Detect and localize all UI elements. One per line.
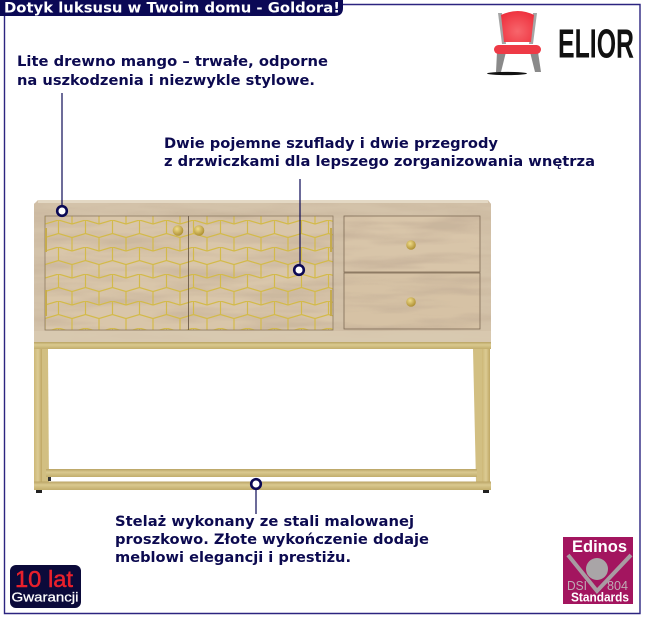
text block: steel frame: proszkowo. Złote wykończenie dodaje: [115, 532, 429, 548]
wooden carcass: [34, 200, 491, 343]
text block: steel frame: meblowi elegancji i prestiżu.: [115, 550, 351, 566]
sideboard illustration: [34, 200, 491, 493]
text block: solid mango wood: Lite drewno mango – trwałe, odporne: [17, 54, 328, 70]
text block: drawers and doors: Dwie pojemne szuflady i dwie przegrody: [164, 136, 498, 152]
badge: Edinos standards: Standards: [571, 590, 629, 604]
door knobs: [173, 225, 204, 236]
bottom drawer: [344, 273, 480, 329]
title banner: Dotyk luksusu w Twoim domu - Goldora!: [4, 0, 340, 16]
callout marker: wood: [57, 93, 67, 216]
text block: steel frame: Stelaż wykonany ze stali malowanej: [115, 514, 414, 530]
top drawer: [344, 216, 480, 272]
badge: Edinos standards: Edinos: [572, 537, 627, 556]
text block: drawers and doors: z drzwiczkami dla lepszego zorganizowania wnętrza: [164, 154, 595, 170]
badge: 10 year warranty: Gwarancji: [12, 590, 79, 604]
callout marker: frame: [251, 479, 261, 514]
icon: red chair: [487, 11, 541, 75]
badge: Edinos standards: DSI: [567, 578, 587, 593]
gold apron strip: [34, 342, 491, 349]
logo: Elior chair and wordmark: [487, 11, 634, 75]
badge: Edinos standards: 804: [607, 578, 628, 593]
badge: 10 year warranty: 10 lat: [15, 566, 74, 592]
text block: solid mango wood: [17, 54, 328, 89]
badge: Edinos standards: [563, 537, 633, 604]
text block: drawers and doors: [164, 136, 595, 170]
text block: solid mango wood: na uszkodzenia i niezwykle stylowe.: [17, 73, 315, 89]
door panels with gold brick pattern: [45, 216, 333, 330]
callout marker: storage: [294, 179, 304, 275]
badge: 10 year warranty: [10, 565, 81, 608]
gold steel frame: [34, 349, 491, 493]
text block: steel frame: [115, 514, 429, 566]
